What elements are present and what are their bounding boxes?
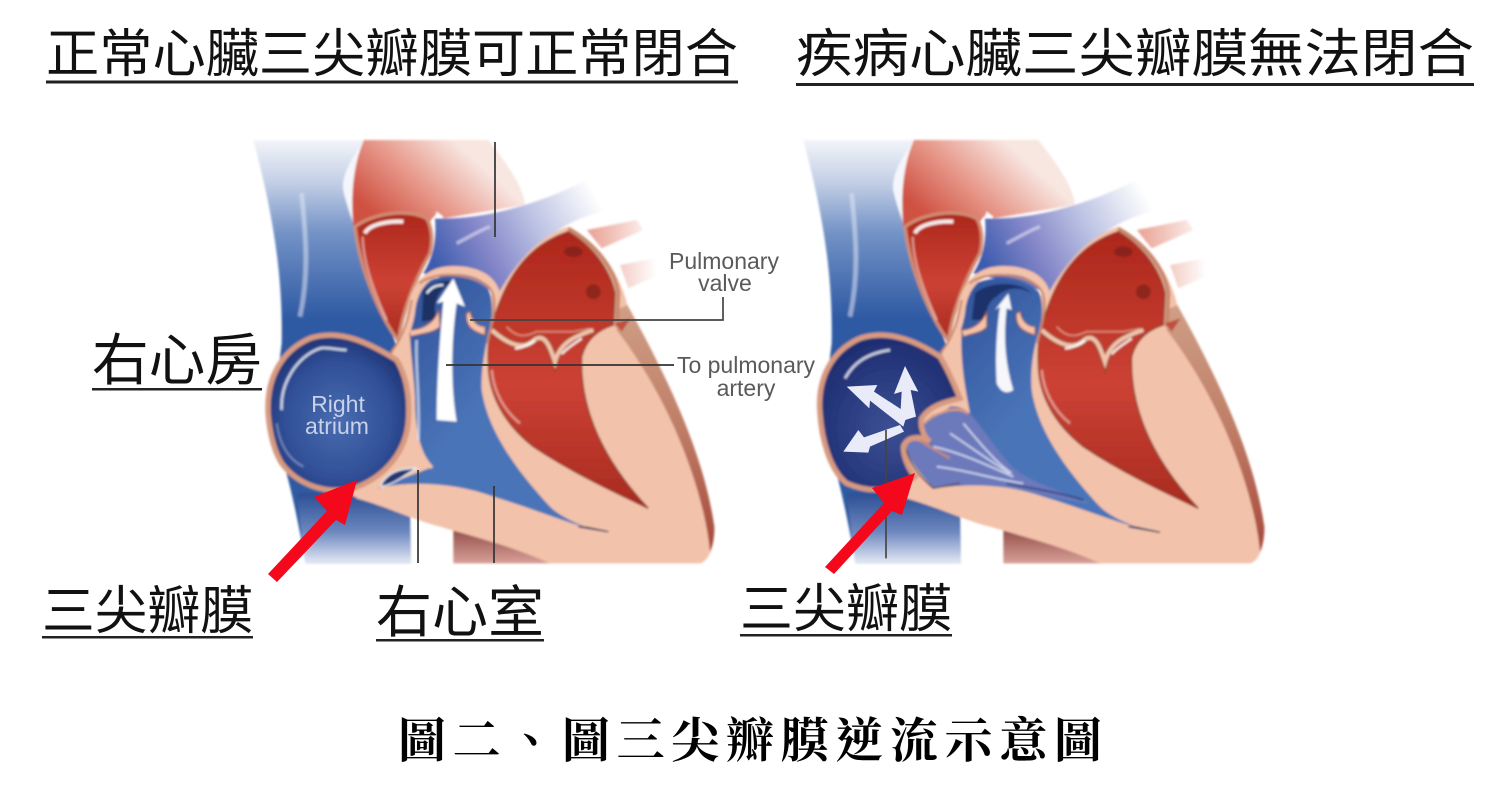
label: right atrium: atrium — [305, 413, 369, 439]
RV top shadow — [972, 284, 1032, 320]
atrial septum wall — [917, 360, 970, 423]
label: pulmonary valve: Pulmonary — [669, 248, 779, 274]
label: right atrium: Right — [311, 391, 365, 417]
right ventricle cavity — [377, 277, 588, 528]
title: normal heart: 正常心臟三尖瓣膜可正常閉合 — [46, 26, 738, 84]
label: pulmonary valve: valve — [698, 270, 752, 296]
right atrium — [820, 335, 960, 490]
label: tricuspid valve right: 三尖瓣膜 — [740, 581, 952, 639]
label: to pulmonary artery: artery — [717, 375, 776, 401]
pulmonary valve leaflets — [410, 310, 440, 337]
label: right ventricle: 右心室 — [376, 581, 544, 644]
atrial septum wall — [333, 360, 433, 497]
regurgitation arrows — [843, 366, 918, 453]
right atrium — [268, 335, 409, 490]
leader lines and English labels: normal heart — [305, 142, 816, 563]
pulmonary valve leaflets — [962, 312, 987, 337]
lower valve wall — [907, 489, 997, 527]
right ventricle cavity — [922, 278, 1140, 528]
red arrow: diseased tricuspid valve — [825, 473, 915, 574]
RV highlights — [422, 281, 453, 322]
lower myocardium strip — [578, 527, 608, 532]
flow arrow — [437, 278, 465, 422]
label: to pulmonary artery: To pulmonary — [677, 352, 816, 378]
caption: 圖二、圖三尖瓣膜逆流示意圖 — [398, 714, 1102, 768]
heart illustration: diseased valve open — [803, 140, 1264, 563]
flow arrow — [995, 293, 1013, 392]
leader line — [883, 430, 888, 558]
red arrow: normal tricuspid valve — [268, 480, 357, 582]
label: right atrium chinese: 右心房 — [92, 329, 262, 392]
label: tricuspid valve left: 三尖瓣膜 — [42, 583, 253, 641]
title: diseased heart: 疾病心臟三尖瓣膜無法閉合 — [796, 26, 1474, 84]
heart illustration: normal valve closed — [253, 140, 714, 563]
open tricuspid leaflets and chordae — [905, 411, 1090, 503]
